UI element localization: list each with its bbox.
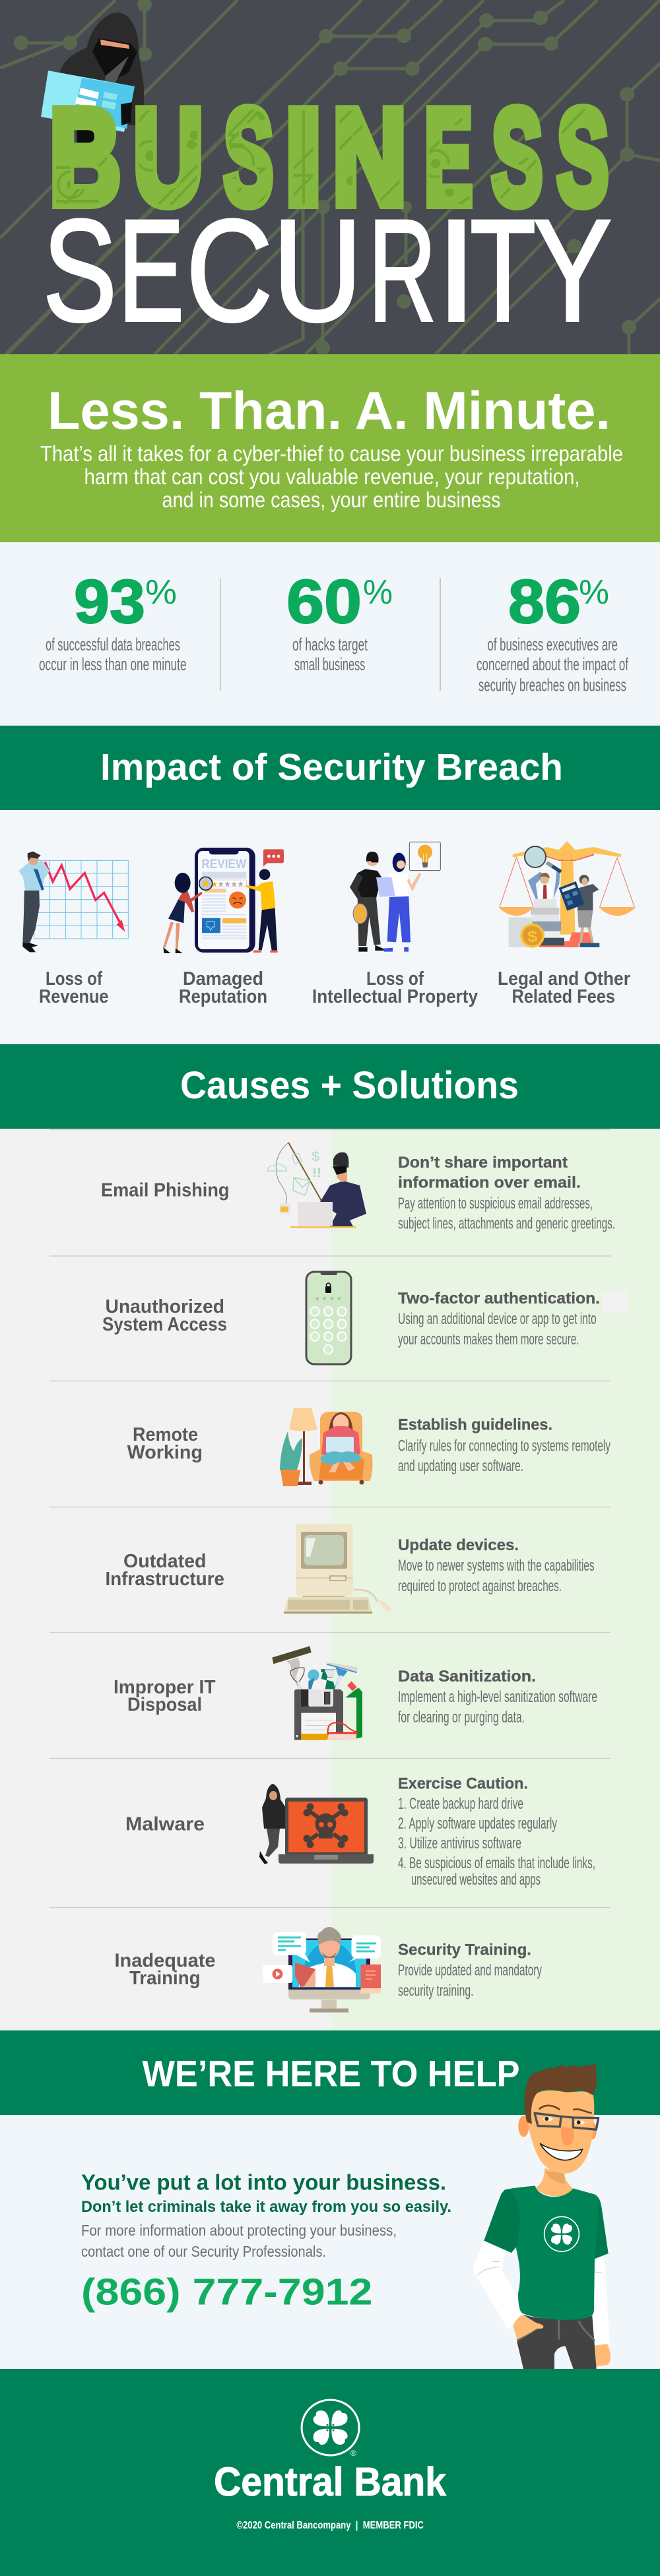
icon: review phone with two people: REVIEW: [201, 858, 247, 871]
copyright: ©2020 Central Bancompany | MEMBER FDIC: [236, 2520, 424, 2531]
panel: causes header: [0, 1044, 660, 1129]
row: malware: Malware: [125, 1814, 205, 1835]
icon: man and falling revenue chart: [18, 852, 128, 952]
solution text: unsecured websites and apps: [411, 1871, 541, 1889]
icon: phisher at laptop: !!: [312, 1166, 321, 1179]
solution text: 3. Utilize antivirus software: [398, 1835, 521, 1852]
phone number: (866) 777-7912: [81, 2271, 372, 2313]
label: [498, 968, 630, 1007]
solution text: [398, 1941, 542, 2000]
icon: legal scales with fees: [498, 841, 636, 948]
title: Security: S: [43, 189, 117, 352]
stat: 86 percent: 86: [508, 567, 581, 636]
panel: help header: [0, 2030, 660, 2115]
title: Security: C: [186, 189, 273, 352]
label: Damaged: [183, 968, 263, 990]
heading: WE’RE HERE TO HELP: [143, 2052, 520, 2094]
row: outdated infrastructure: Infrastructure: [106, 1569, 224, 1590]
stat: 93 percent: of successful data breaches: [46, 635, 180, 654]
label: Legal and Other: [498, 968, 630, 990]
title: Security: Y: [533, 189, 612, 352]
contact body: For more information about protecting your business,: [81, 2222, 397, 2239]
row: email phishing: Email Phishing: [101, 1180, 230, 1201]
row: email phishing: [101, 1143, 615, 1233]
heading: Impact of Security Breach: [100, 746, 563, 788]
solution text: and updating user software.: [398, 1457, 523, 1475]
solution text: required to protect against breaches.: [398, 1577, 562, 1595]
title: Security: U: [273, 189, 362, 352]
icon: review phone with two people: [163, 848, 284, 953]
label: Revenue: [39, 986, 108, 1007]
stat: 93 percent: occur in less than one minute: [39, 654, 186, 674]
stat: 60 percent: [286, 567, 393, 674]
stat: 93 percent: %: [145, 573, 177, 612]
stat: 86 percent: %: [579, 573, 609, 612]
icon: phisher at laptop: $: [312, 1150, 319, 1164]
panel: impact header: [0, 726, 660, 810]
solution text: 1. Create backup hard drive: [398, 1795, 523, 1813]
label: Loss of: [366, 968, 424, 990]
label: [39, 968, 108, 1007]
title: Business: S: [492, 81, 543, 233]
icon: hooded hacker with tablet: [41, 13, 144, 162]
intro text: harm that can cost you valuable revenue, your reputation,: [84, 464, 579, 489]
row: improper it disposal: Improper IT: [114, 1677, 216, 1698]
solution text: Data Sanitization.: [398, 1668, 536, 1685]
title: Security: I: [436, 189, 477, 352]
row: outdated infrastructure: Outdated: [123, 1551, 206, 1572]
row: outdated infrastructure: [106, 1524, 594, 1614]
row: malware: [125, 1775, 595, 1889]
stat: 60 percent: 60: [286, 567, 362, 636]
stat: 93 percent: [39, 567, 186, 674]
solution text: 2. Apply software updates regularly: [398, 1815, 557, 1833]
panel: hero: [0, 0, 660, 354]
panel: causes and solutions table: [0, 1129, 660, 2030]
row: remote working: Working: [127, 1442, 203, 1463]
row: unauthorized system access: Unauthorized: [106, 1296, 224, 1317]
solution text: Update devices.: [398, 1536, 519, 1554]
heading: Less. Than. A. Minute.: [48, 381, 610, 441]
solution text: [398, 1416, 610, 1475]
icon: old computer: [284, 1524, 392, 1614]
label: [312, 968, 478, 1007]
stat: 60 percent: small business: [294, 654, 366, 674]
title: Business: N: [333, 81, 407, 233]
icon: floppy disk and cleaning tools: [272, 1646, 362, 1740]
title: Business: S: [557, 81, 609, 233]
contact body: [81, 2222, 397, 2260]
logo: Central Bank flower: [302, 2400, 359, 2458]
contact headline: You’ve put a lot into your business.: [81, 2170, 446, 2195]
solution text: information over email.: [398, 1174, 581, 1192]
icon: smiling man in green shirt: [473, 2064, 610, 2372]
circuit traces on title letters: [56, 109, 586, 205]
solution text: Two-factor authentication.: [398, 1290, 600, 1307]
heading: Causes + Solutions: [180, 1064, 519, 1107]
solution text: for clearing or purging data.: [398, 1709, 525, 1726]
title: Security: R: [368, 189, 436, 352]
solution text: [398, 1290, 628, 1348]
stat: 60 percent: %: [363, 573, 393, 612]
label: [179, 968, 267, 1007]
label: Related Fees: [512, 986, 615, 1007]
row: unauthorized system access: [102, 1271, 628, 1364]
panel: impact items: [0, 810, 660, 1044]
icon: video training monitor: [263, 1927, 381, 2013]
panel: footer: [0, 2369, 660, 2576]
icon: phone keypad: [306, 1271, 351, 1364]
panel: statistics: [0, 542, 660, 726]
label: Loss of: [46, 968, 102, 990]
contact body: contact one of our Security Professionals.: [81, 2243, 326, 2260]
contact subhead: Don’t let criminals take it away from you so easily.: [81, 2198, 451, 2216]
solution text: Establish guidelines.: [398, 1416, 552, 1434]
title: Business: I: [284, 81, 322, 233]
row: improper it disposal: [114, 1646, 597, 1740]
row: remote working: Remote: [133, 1424, 198, 1445]
solution text: [398, 1536, 594, 1595]
circuit board background: [0, 0, 660, 409]
stat: 60 percent: of hacks target: [292, 635, 368, 654]
intro text: and in some cases, your entire business: [162, 487, 500, 512]
solution text: security training.: [398, 1982, 474, 2000]
icon: woman on armchair with lamp: [280, 1408, 372, 1486]
panel: contact: [0, 2115, 660, 2369]
solution text: Provide updated and mandatory: [398, 1962, 542, 1980]
title: Business: B: [50, 81, 121, 233]
row: inadequate training: [115, 1927, 542, 2013]
row: improper it disposal: Disposal: [127, 1694, 202, 1715]
solution text: [398, 1668, 597, 1726]
title: Business: E: [424, 81, 473, 233]
solution text: [398, 1775, 595, 1889]
title: Business: U: [133, 81, 203, 233]
icon: legal scales with fees: $: [527, 927, 537, 945]
icon: phisher at laptop: [267, 1143, 366, 1228]
panel: less than a minute: [0, 354, 660, 542]
solution text: Don’t share important: [398, 1154, 568, 1172]
icon: thief looking at idea: [350, 842, 440, 952]
row: inadequate training: Training: [129, 1968, 201, 1989]
stat: 86 percent: [477, 567, 628, 695]
solution text: Exercise Caution.: [398, 1775, 528, 1792]
logo: Central Bank flower: ®: [350, 2449, 356, 2458]
icon: hacker and infected laptop: [259, 1784, 374, 1864]
solution text: [398, 1154, 615, 1233]
title: Security: T: [470, 189, 536, 352]
row: remote working: [127, 1408, 610, 1486]
intro text: [40, 441, 623, 512]
title: Business: S: [224, 81, 273, 233]
row: unauthorized system access: System Access: [102, 1314, 227, 1335]
solution text: Security Training.: [398, 1941, 531, 1959]
brand name: Central Bank: [214, 2459, 446, 2504]
label: Reputation: [179, 986, 267, 1007]
row: inadequate training: Inadequate: [115, 1951, 215, 1972]
stat: 93 percent: 93: [74, 567, 145, 636]
title: Security: E: [118, 189, 184, 352]
label: Intellectual Property: [312, 986, 478, 1007]
